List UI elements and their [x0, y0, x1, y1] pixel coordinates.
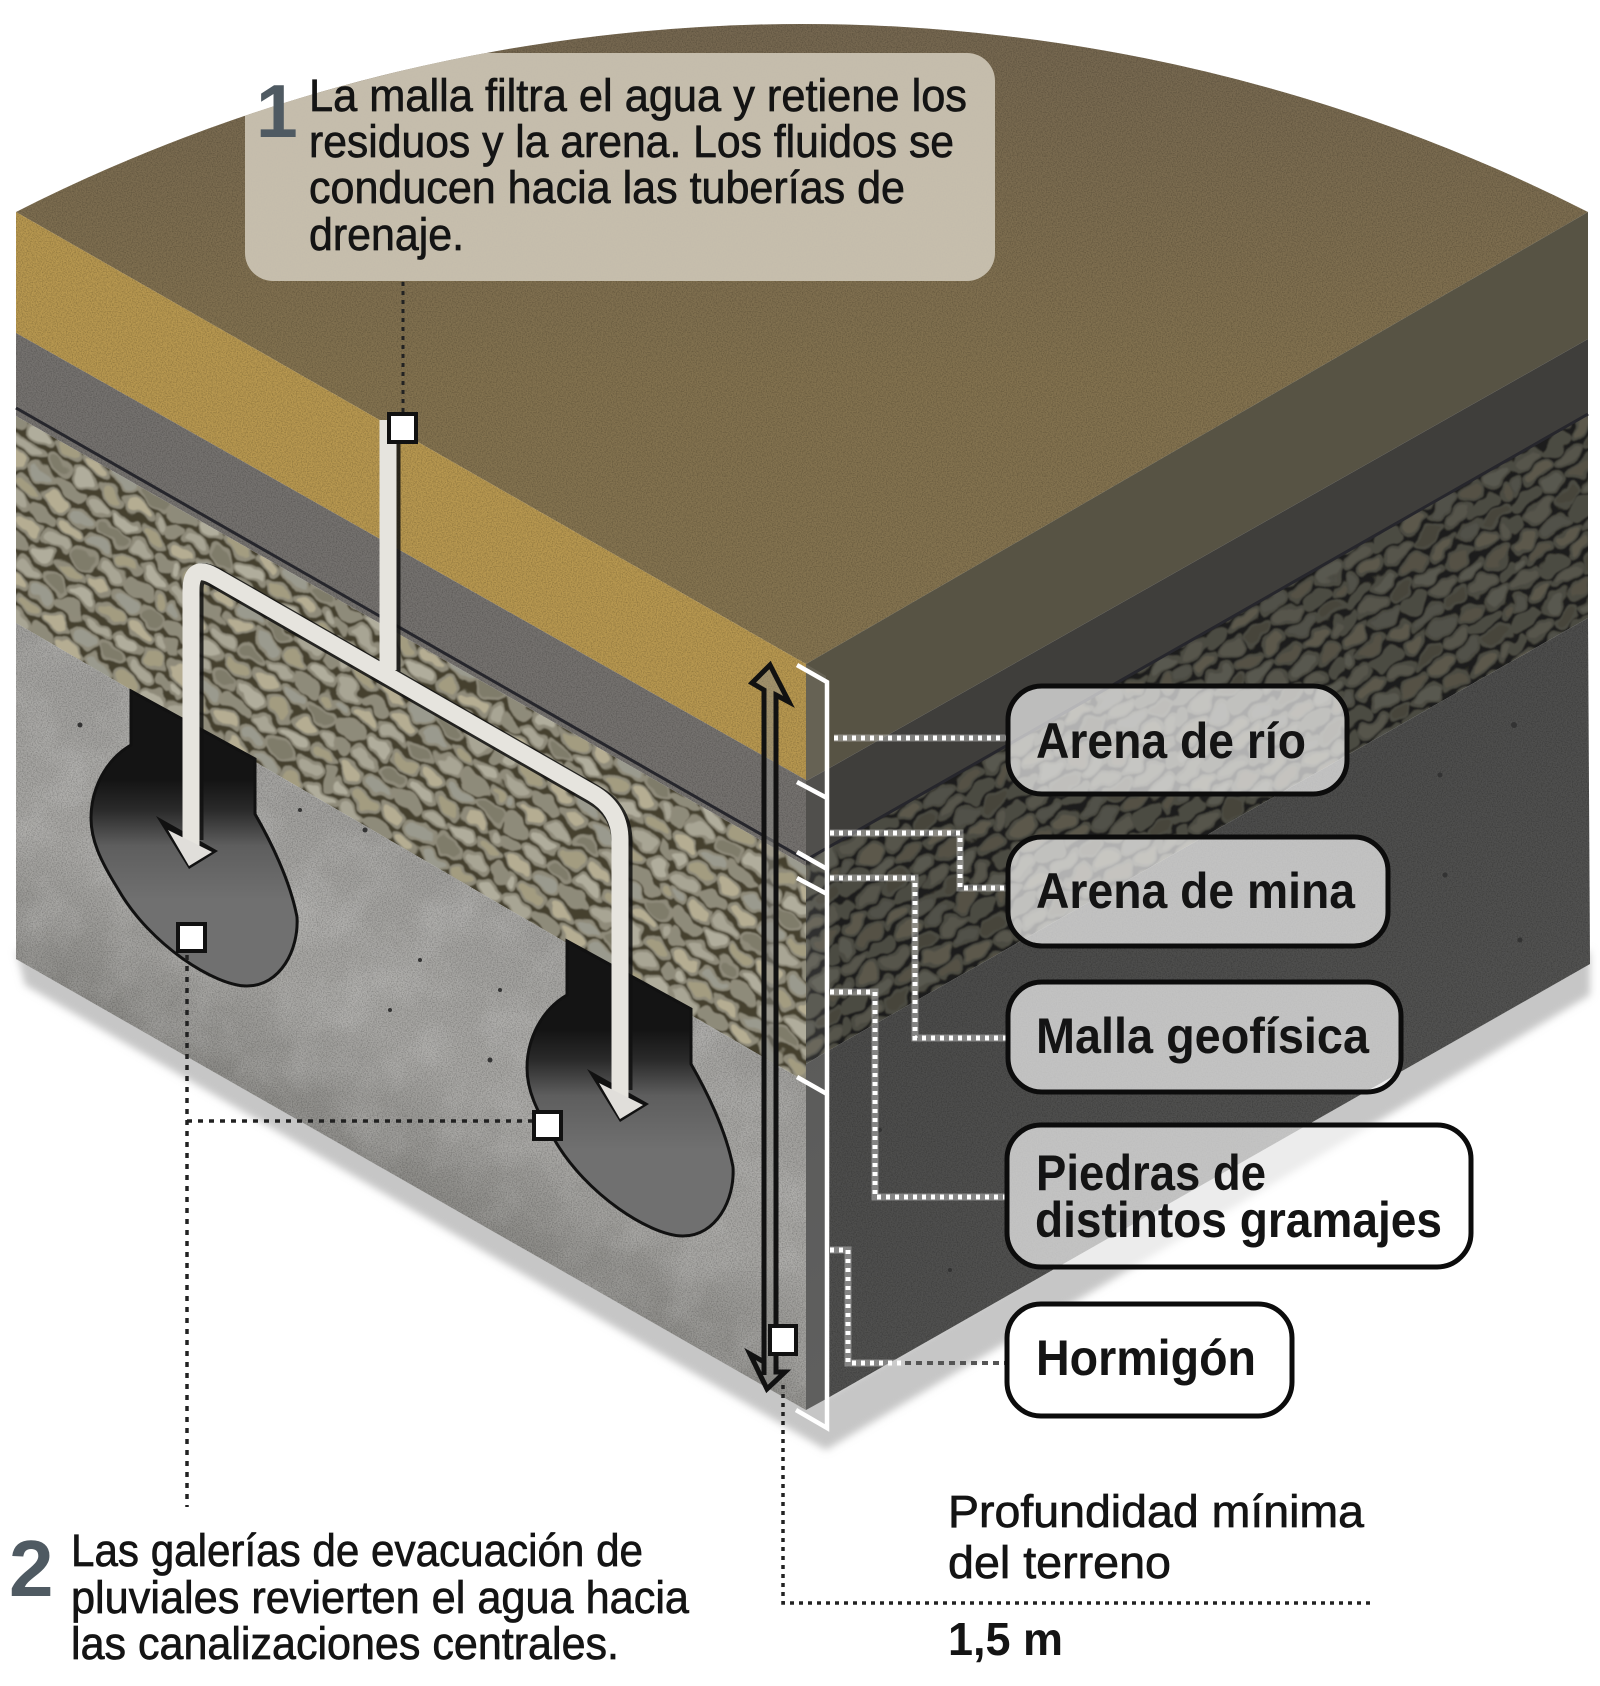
label: Hormigón: [1007, 1304, 1292, 1416]
galería hole right: [527, 941, 733, 1236]
pipe outline: [193, 420, 622, 1090]
label: Malla geofísica: [1008, 982, 1401, 1092]
label: Arena de río: [1008, 686, 1347, 794]
label: Arena de río: Arena de río: [1036, 713, 1306, 769]
right face: mine sand layer: [806, 339, 1588, 860]
pipe fill: [191, 420, 620, 1099]
label: Arena de mina: Arena de mina: [1036, 863, 1356, 919]
geophysical mesh lines: [16, 408, 1588, 860]
callout background clipped by dome: [245, 53, 995, 281]
marker square right hole: [534, 1112, 561, 1139]
minimum depth text: [948, 1486, 1365, 1665]
depth bracket with layer ticks: [796, 665, 827, 1428]
label: Malla geofísica: Malla geofísica: [1036, 1008, 1370, 1064]
arrow outlines: [156, 816, 218, 869]
depth leader line: [783, 1385, 1372, 1603]
depth marker square: [770, 1326, 796, 1354]
callout text 2: [71, 1525, 690, 1669]
callout text 2: las canalizaciones centrales.: [71, 1618, 619, 1669]
minimum depth text: del terreno: [948, 1537, 1171, 1588]
callout text 2: pluviales revierten el agua hacia: [71, 1572, 690, 1623]
left face: river sand layer: [16, 212, 806, 780]
callout 1 leader: [402, 282, 404, 415]
depth double arrow: [750, 665, 789, 1389]
label: Arena de mina: [1008, 837, 1388, 946]
callout panel 1: [245, 53, 995, 281]
callout text 1: drenaje.: [309, 209, 464, 260]
label: Hormigón: Hormigón: [1036, 1330, 1256, 1386]
left face: concrete layer: [16, 623, 806, 1410]
depth value: 1,5 m: [948, 1613, 1063, 1665]
arrow heads: [168, 830, 212, 866]
callout text 1: residuos y la arena. Los fluidos se: [309, 116, 954, 167]
number 2: 2: [9, 1524, 54, 1613]
label: Piedras de distintos gramajes: [1007, 1125, 1471, 1267]
corner strip: [806, 664, 826, 1410]
label: Piedras de distintos gramajes: Piedras de: [1036, 1145, 1266, 1201]
concrete pores: [78, 722, 1522, 1272]
callout text 1: conducen hacia las tuberías de: [309, 162, 905, 213]
callout text 1: [309, 70, 967, 260]
layer connector lines: [830, 738, 1006, 1363]
callout 2 leader lines: [187, 955, 535, 1507]
galería hole left: [91, 691, 297, 986]
drainage pipe with arrows: [156, 420, 649, 1122]
label: Piedras de distintos gramajes: distintos gramajes: [1035, 1192, 1442, 1248]
callout 2: [9, 1524, 690, 1669]
callout text 1: La malla filtra el agua y retiene los: [309, 70, 967, 121]
callout text 2: Las galerías de evacuación de: [71, 1525, 643, 1576]
number 1: 1: [256, 69, 298, 153]
marker square 1: [389, 414, 416, 442]
left face: mine sand layer: [16, 333, 806, 866]
left face: stone layer: [16, 416, 806, 1080]
marker square left hole: [178, 924, 205, 951]
top ground surface: [16, 24, 1588, 664]
right face: river sand layer: [806, 212, 1588, 781]
minimum depth text: Profundidad mínima: [948, 1486, 1365, 1537]
right face: stone layer: [806, 416, 1588, 1064]
right face: concrete layer: [806, 618, 1590, 1410]
drop shadow under block: [16, 950, 1590, 1450]
